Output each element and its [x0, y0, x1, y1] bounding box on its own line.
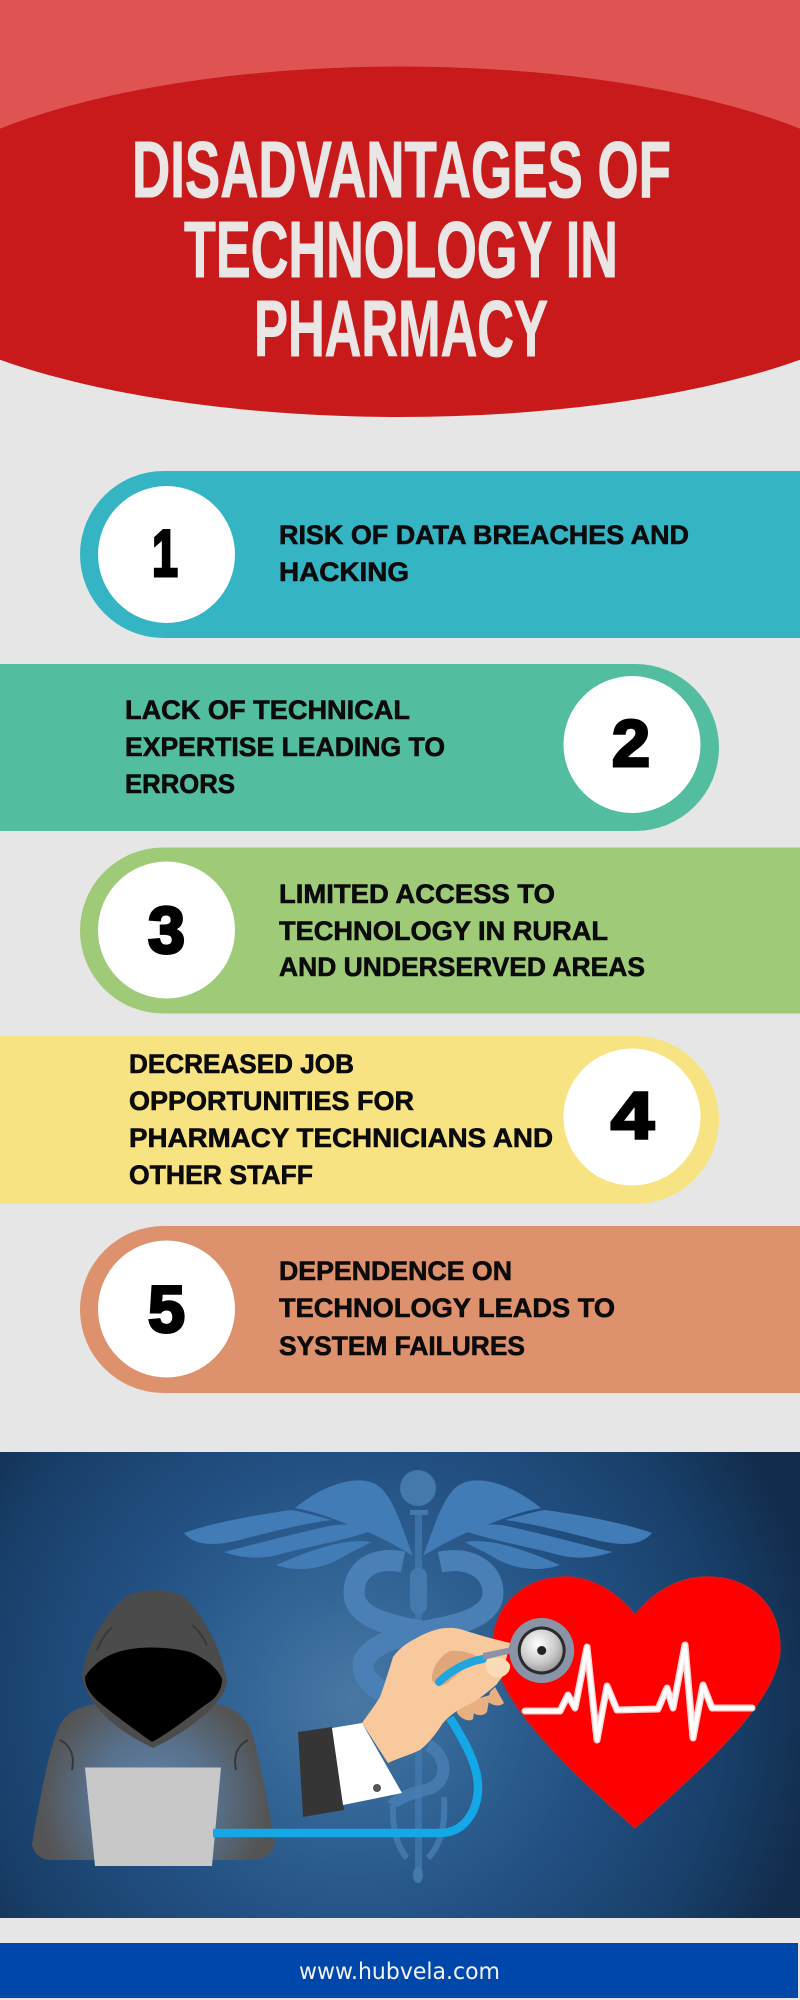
panel: item 5: [80, 1226, 800, 1393]
panel: item 3: [80, 848, 800, 1014]
text: item 2: [125, 695, 445, 799]
header ellipse: [0, 66, 800, 417]
number 2: 2: [612, 706, 650, 780]
text: item 3: [279, 879, 645, 982]
text: item 3: TECHNOLOGY IN RURAL: [279, 916, 608, 946]
text: item 4: DECREASED JOB: [129, 1049, 354, 1079]
ECG line: [525, 1645, 752, 1740]
number 5: 5: [148, 1272, 185, 1346]
text: item 5: DEPENDENCE ON: [279, 1256, 512, 1286]
cuff: [332, 1723, 402, 1805]
icon: heart: [493, 1577, 780, 1828]
text: item 5: TECHNOLOGY LEADS TO: [279, 1293, 615, 1323]
icon: chest piece: [483, 1618, 574, 1683]
sleeve: [298, 1727, 344, 1817]
cufflink: [373, 1784, 381, 1792]
text: item 5: [279, 1256, 615, 1361]
illustration panel: [0, 1452, 800, 1918]
title: PHARMACY: [254, 284, 548, 373]
finger shadow: [432, 1651, 478, 1685]
footer bar: [0, 1943, 798, 1998]
hacker body: [32, 1704, 275, 1860]
text: item 4: [129, 1049, 553, 1190]
fingers: [456, 1687, 504, 1720]
number 3: 3: [148, 893, 185, 967]
text: item 3: AND UNDERSERVED AREAS: [279, 952, 645, 982]
tube in hand: [439, 1659, 483, 1682]
text: item 2: LACK OF TECHNICAL: [125, 695, 410, 725]
header band: [0, 0, 800, 200]
hood folds: [60, 1625, 248, 1770]
panel: item 1: [80, 471, 800, 638]
text: item 4: OTHER STAFF: [129, 1160, 313, 1190]
hand: [362, 1628, 510, 1763]
text: item 1: [279, 520, 689, 587]
laptop: [85, 1768, 221, 1866]
text: item 3: LIMITED ACCESS TO: [279, 879, 555, 909]
text: item 1: RISK OF DATA BREACHES AND: [279, 520, 689, 550]
panel: item 2: [0, 664, 719, 831]
text: item 5: SYSTEM FAILURES: [279, 1331, 525, 1361]
footer url: www.hubvela.com: [299, 1959, 500, 1985]
wings: [184, 1480, 652, 1569]
hood face: [85, 1647, 222, 1742]
text: item 1: HACKING: [279, 557, 409, 587]
icon: hand with stethoscope: [298, 1628, 510, 1817]
text: item 2: ERRORS: [125, 769, 235, 799]
hood: [82, 1590, 227, 1748]
text: item 4: OPPORTUNITIES FOR: [129, 1086, 414, 1116]
text: item 2: EXPERTISE LEADING TO: [125, 732, 445, 762]
title: [132, 125, 671, 373]
icon: hacker: [32, 1590, 275, 1866]
number 1: 1: [152, 516, 178, 590]
snakes: [354, 1561, 493, 1705]
number 4: 4: [611, 1078, 654, 1152]
panel: item 4: [0, 1036, 719, 1204]
icon: caduceus: [184, 1470, 652, 1883]
text: item 4: PHARMACY TECHNICIANS AND: [129, 1123, 553, 1153]
thumb: [486, 1658, 510, 1677]
icon: stethoscope tube: [213, 1718, 478, 1833]
